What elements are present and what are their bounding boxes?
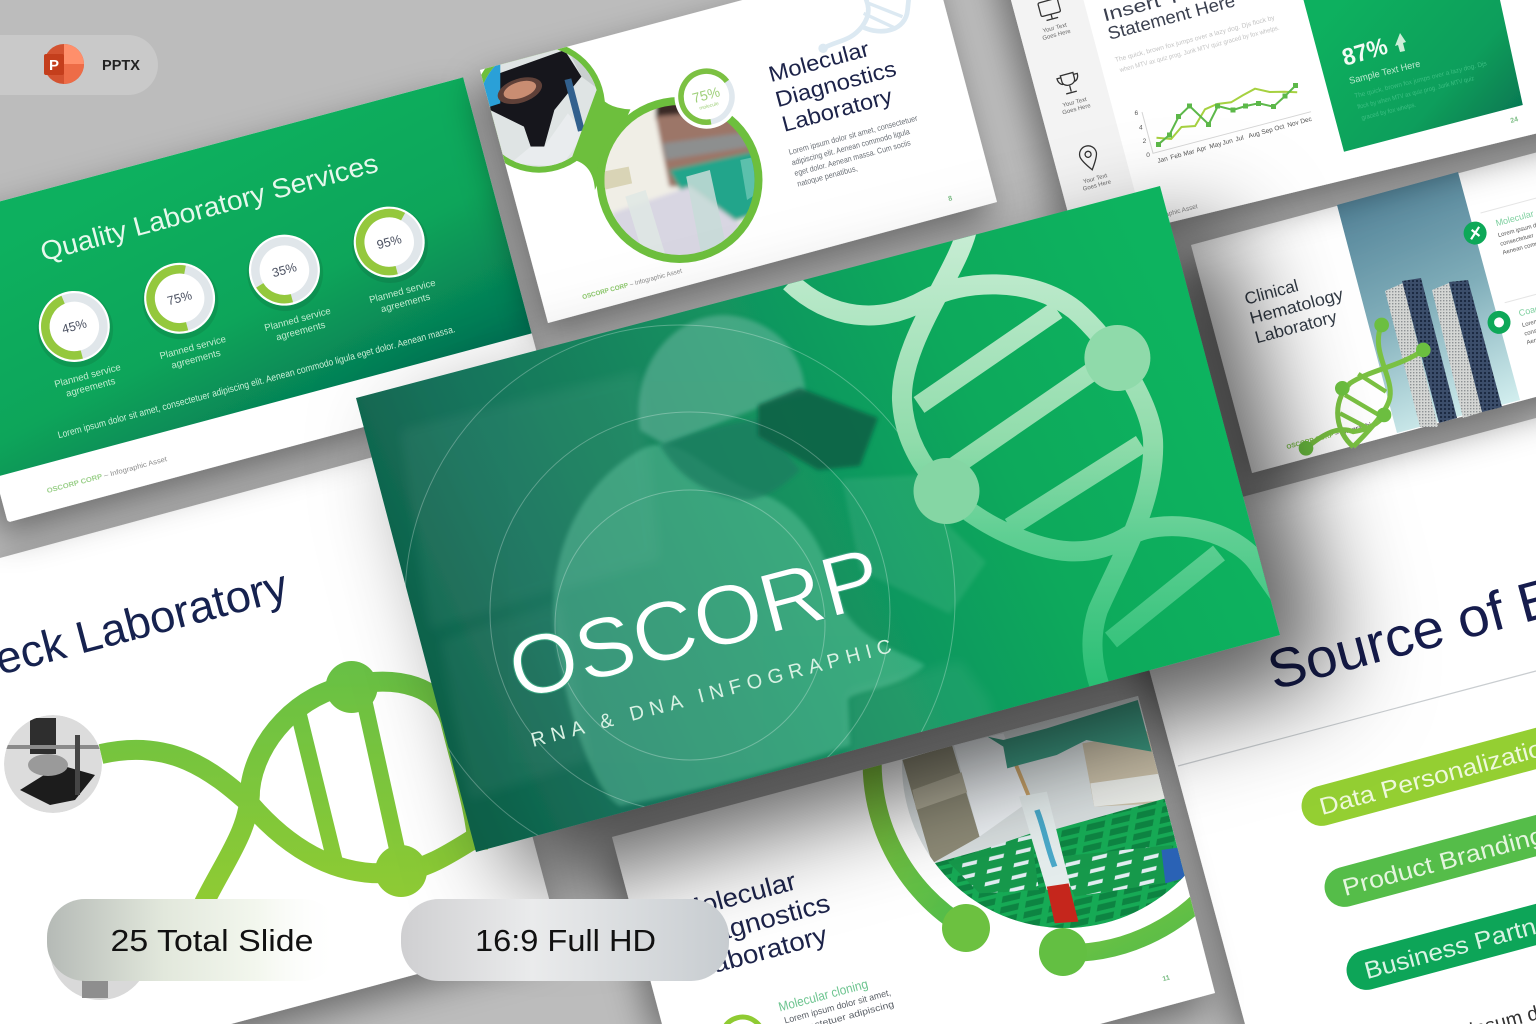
labels: planned service agreements: Planned service bbox=[159, 334, 227, 362]
labels: planned service agreements: agreements bbox=[380, 292, 432, 315]
body text bbox=[1354, 60, 1488, 122]
icon: location pin bbox=[1078, 144, 1100, 172]
heading: molecular diagnostics laboratory: Laboratory bbox=[694, 919, 830, 983]
line chart: Feb bbox=[1170, 152, 1183, 161]
body text: adipiscing elit. Aenean commodo ligula bbox=[791, 127, 911, 167]
heading: molecular diagnostics laboratory: Laboratory bbox=[779, 83, 895, 137]
donut: 75% bbox=[134, 254, 227, 348]
label: molecular cloning: Molecular cloning bbox=[777, 976, 870, 1014]
heading: molecular diagnostics laboratory: Diagnostics bbox=[685, 888, 833, 954]
badge: 16:9 full hd: 16:9 Full HD bbox=[475, 923, 656, 958]
service: molecular bbox=[1459, 179, 1536, 265]
heading: clinical hematology laboratory: Laboratory bbox=[1253, 307, 1339, 347]
line chart: Mar bbox=[1183, 148, 1196, 158]
panel: statement chart slide bbox=[996, 0, 1536, 245]
label: your text 2: Your Text bbox=[1062, 97, 1088, 109]
arc: green ring right bbox=[1085, 896, 1195, 962]
stat: 87%: 87% bbox=[1339, 33, 1391, 72]
line chart: Apr bbox=[1196, 145, 1208, 154]
service: coagulation bbox=[1483, 269, 1536, 355]
line chart: 0 bbox=[1146, 152, 1150, 159]
heading: clinical hematology laboratory: Clinical bbox=[1242, 276, 1301, 309]
icon: trophy bbox=[1056, 71, 1082, 95]
label: your text 1: Your Text bbox=[1042, 22, 1068, 35]
labels: planned service agreements: Planned service bbox=[368, 278, 437, 306]
footer: Infographic Asset bbox=[1149, 203, 1199, 223]
donut: 45%: 45% bbox=[60, 316, 88, 336]
labels: planned service agreements bbox=[53, 278, 440, 402]
pill: data personalization bbox=[1297, 706, 1536, 830]
line chart: May bbox=[1209, 140, 1223, 151]
labels: planned service agreements: agreements bbox=[275, 320, 327, 343]
photo: scientist circle bbox=[595, 93, 764, 267]
page number: 24 bbox=[1510, 116, 1519, 125]
body text: eget dolor. Aenean massa. Cum sociis bbox=[793, 138, 912, 178]
pill: business partner bbox=[1342, 870, 1536, 994]
donut: 75%: 75% bbox=[166, 288, 194, 308]
photo: test tube in green rack bbox=[902, 696, 1185, 928]
subtitle: rna and dna infographic: RNA & DNA INFOGRAPHIC bbox=[529, 636, 894, 752]
heading: clinical hematology laboratory bbox=[1242, 265, 1351, 347]
body text: Lorem ipsum dolor sit amet, consectetuer adipiscing elit. Aenean commodo ligula eget dolor. Aenean massa. bbox=[57, 324, 457, 441]
body text: when MTV ax quiz prog. Junk MTV quiz graced by fox whelps. bbox=[1118, 25, 1280, 74]
label: your text 1: Goes Here bbox=[1042, 29, 1072, 42]
service: molecular: consectetuer bbox=[1500, 233, 1534, 248]
panel: quality laboratory services slide bbox=[0, 77, 544, 522]
icon: monitor bbox=[1038, 0, 1062, 22]
body text: natoque penatibus, bbox=[796, 164, 858, 189]
donut: 35%: 35% bbox=[271, 260, 298, 280]
illustration: large pale dna helix bbox=[790, 225, 1290, 700]
panel: central cover slide bbox=[356, 186, 1290, 875]
title: oscorp: OSCORP bbox=[499, 529, 891, 717]
line chart bbox=[1134, 83, 1313, 165]
icon: powerpoint: P bbox=[49, 57, 59, 74]
panel: lower molecular diagnostics slide bbox=[612, 690, 1225, 1024]
heading: molecular diagnostics laboratory: Molecular bbox=[676, 865, 800, 926]
donut: 95%: 95% bbox=[375, 232, 403, 252]
ball: right arc end bbox=[1039, 928, 1087, 976]
line chart: Jul bbox=[1235, 134, 1245, 143]
line chart: Jun bbox=[1222, 137, 1234, 147]
donut badge: 75% molecule bbox=[674, 68, 735, 129]
decorative concentric circles bbox=[405, 325, 955, 875]
labels: planned service agreements: agreements bbox=[65, 376, 117, 400]
label: pptx: PPTX bbox=[102, 58, 140, 74]
footer: OSCORP CORP – Infographic bbox=[1286, 421, 1376, 451]
label: sample text: Sample Text Here bbox=[1348, 59, 1422, 87]
panel: molecular diagnostics slide bbox=[473, 0, 997, 323]
line chart: Dec bbox=[1300, 116, 1313, 126]
pill: product branding bbox=[1320, 787, 1536, 911]
icon: up arrow bbox=[1395, 33, 1406, 52]
footer: OSCORP CORP – Infographic Asset bbox=[582, 268, 683, 301]
icon: powerpoint bbox=[44, 44, 84, 84]
pill: data personalization: Data Personalization bbox=[1317, 731, 1536, 821]
photo: microscope circle bbox=[473, 40, 630, 190]
donut: 35% bbox=[239, 226, 332, 320]
badge: 25 total slide: 25 Total Slide bbox=[110, 923, 314, 958]
donut: 95% bbox=[343, 198, 437, 292]
labels: planned service agreements: Planned service bbox=[53, 362, 122, 390]
label: your text 2: Goes Here bbox=[1062, 103, 1092, 116]
illustration: small green dna helix bbox=[1299, 318, 1431, 456]
body text: Lorem ipsum dolor sit amet, consectetuer bbox=[788, 114, 919, 157]
illustration: large green dna helix bbox=[101, 661, 480, 905]
heading: clinical hematology laboratory: Hematology bbox=[1248, 285, 1346, 328]
page number: 11 bbox=[1162, 975, 1171, 983]
photo: grayscale microscope circle bbox=[4, 715, 102, 813]
icon ring bbox=[717, 1012, 768, 1024]
labels: planned service agreements: agreements bbox=[170, 348, 222, 371]
panel: clinical hematology slide bbox=[1191, 131, 1536, 473]
badge: 16:9 full hd bbox=[401, 899, 729, 981]
line chart: Aug bbox=[1248, 130, 1261, 140]
heading: quality laboratory services: Quality Laboratory Services bbox=[37, 148, 381, 267]
labels: planned service agreements: Planned service bbox=[263, 306, 332, 334]
line chart: Oct bbox=[1274, 123, 1285, 133]
body text: The quick, brown fox jumps over a lazy dog. Djs flock by bbox=[1114, 14, 1276, 64]
line chart: 2 bbox=[1143, 138, 1147, 145]
line chart: Jan bbox=[1157, 155, 1169, 165]
heading: molecular diagnostics laboratory: Diagnostics bbox=[773, 56, 899, 112]
panel: check laboratory slide bbox=[0, 442, 559, 1024]
footer: OSCORP CORP – Infographic Asset bbox=[46, 456, 168, 495]
label: your text 3: Your Text bbox=[1083, 173, 1108, 185]
body text: The quick, brown fox jumps over a lazy dog. Djs bbox=[1354, 60, 1488, 100]
photo: lower gray circle bbox=[50, 900, 150, 1000]
label: your text 3: Goes Here bbox=[1082, 179, 1113, 193]
donut badge: 75% molecule: molecule bbox=[699, 101, 720, 112]
badge: pptx bbox=[0, 35, 158, 95]
panel: green stat card bbox=[1304, 0, 1523, 152]
connector: neck between circles bbox=[571, 90, 630, 190]
line chart: Sep bbox=[1261, 126, 1274, 136]
donut: 45% bbox=[28, 282, 122, 376]
sidebar bbox=[996, 0, 1144, 245]
donut badge: 75% molecule: 75% bbox=[690, 83, 722, 106]
line chart: 6 bbox=[1134, 110, 1138, 117]
line chart: 4 bbox=[1139, 124, 1143, 132]
photo: scientist at microscope overlay bbox=[400, 315, 1000, 806]
photo: sky and towers bbox=[1337, 172, 1520, 433]
heading: molecular diagnostics laboratory bbox=[676, 859, 841, 984]
arc: green ring left bbox=[862, 764, 954, 924]
badge: 25 total slide bbox=[47, 899, 340, 981]
heading: molecular diagnostics laboratory: Molecular bbox=[766, 36, 872, 87]
ball: left arc end bbox=[942, 904, 990, 952]
illustration: pale dna watermark bbox=[818, 0, 909, 53]
body text: graced by fox whelps. bbox=[1361, 102, 1417, 122]
body text: flock by when MTV ax quiz prog. Junk MTV quiz bbox=[1357, 75, 1475, 111]
service: molecular: Molecular bbox=[1494, 208, 1535, 228]
line chart: Nov bbox=[1287, 119, 1300, 129]
page number: 8 bbox=[948, 195, 953, 203]
heading: molecular diagnostics laboratory bbox=[766, 31, 905, 137]
panel: source of slide bbox=[1112, 418, 1536, 1024]
pill: product branding: Product Branding bbox=[1340, 822, 1536, 902]
